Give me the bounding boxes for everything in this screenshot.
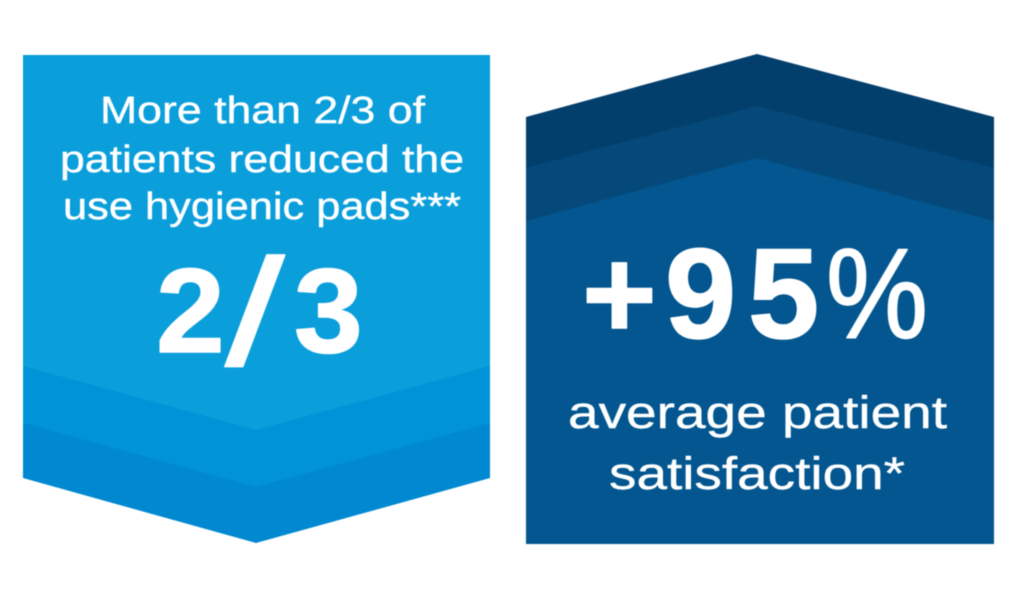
text: pads description: More than 2/3 of	[100, 90, 426, 132]
panel shape: darkest top chevron	[526, 54, 994, 544]
panel: patient satisfaction statistic	[526, 54, 994, 544]
text: pads description: use hygienic pads***	[63, 186, 461, 228]
text: satisfaction description	[568, 387, 948, 499]
big number: 2/3: /	[225, 228, 285, 387]
text: satisfaction description: average patient	[568, 387, 948, 438]
panel shape: middle chevron	[526, 106, 994, 544]
big number: +95%: 5	[748, 223, 819, 366]
big number: +95%: 9	[665, 223, 736, 366]
panel shape: darkest bottom chevron	[23, 55, 490, 543]
text: pads description: patients reduced the	[60, 139, 464, 181]
text: pads description	[60, 90, 464, 228]
big number: 2/3: 2	[156, 244, 225, 378]
text: satisfaction description: satisfaction*	[609, 448, 905, 499]
big number: 2/3: 3	[294, 244, 363, 378]
big number: +95%: +	[582, 223, 657, 366]
panel shape: middle chevron	[23, 55, 490, 487]
panel shape: light main area	[23, 55, 490, 430]
panel shape: main area	[526, 158, 994, 544]
panel: hygienic pads statistic	[23, 55, 490, 543]
big number: +95%: %	[826, 223, 928, 366]
